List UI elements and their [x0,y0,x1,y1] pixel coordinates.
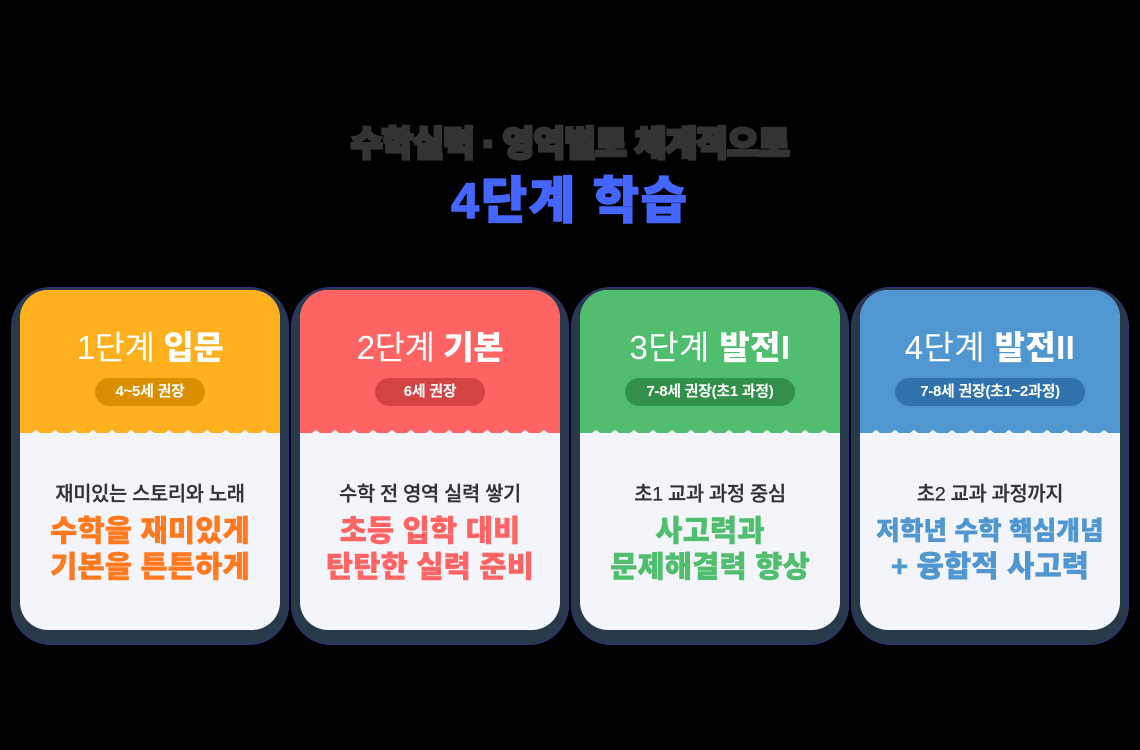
stage 1 heading: 1단계 입문 [77,329,223,366]
stage 2 highlight: 초등 입학 대비 [340,515,520,548]
stage 2 description: 수학 전 영역 실력 쌓기 [339,484,521,506]
stage 1 highlight: 수학을 재미있게 [50,515,250,548]
stage 3 highlight [610,515,810,584]
stage 1 header [20,290,280,434]
stage 3 highlight: 사고력과 [655,515,765,548]
stage 2 heading: 2단계 기본 [357,329,503,366]
stage 1 highlight [50,515,250,584]
stage 4 heading: 4단계 발전II [905,329,1075,366]
scalloped edge [300,430,560,434]
stage 4 highlight: 저학년 수학 핵심개념 [876,518,1104,546]
stage 1 age pill: 4~5세 권장 [116,383,184,400]
stage 2 header [300,290,560,434]
stage 1 age pill [95,378,205,406]
stage 4 age pill [895,378,1085,406]
stage 3 age pill [625,378,795,406]
stage 4 age pill: 7-8세 권장(초1~2과정) [920,383,1060,400]
stage 2 age pill: 6세 권장 [404,383,456,400]
panel: stage 4 [851,287,1129,645]
title line 1: 수학실력 · 영역별로 체계적으로 [351,126,789,164]
stage 4 header [860,290,1120,434]
stage 3 header [580,290,840,434]
scalloped edge [580,430,840,434]
stage 2 highlight [326,515,534,584]
panel: stage 2 [291,287,569,645]
stage 1 description: 재미있는 스토리와 노래 [55,484,245,506]
stage 4 highlight: + 융합적 사고력 [891,550,1089,584]
panel: stage 3 [571,287,849,645]
stage 4 highlight [876,517,1104,584]
scalloped edge [20,430,280,434]
stage 1 highlight: 기본을 튼튼하게 [50,551,250,584]
stage 3 heading: 3단계 발전I [630,329,790,366]
stage 3 highlight: 문제해결력 향상 [610,551,810,584]
stage 4 description: 초2 교과 과정까지 [917,484,1063,506]
scalloped edge [860,430,1120,434]
stage 3 description: 초1 교과 과정 중심 [634,484,786,506]
stage 3 age pill: 7-8세 권장(초1 과정) [647,383,773,400]
stage 2 highlight: 탄탄한 실력 준비 [326,551,534,584]
title block [350,124,790,229]
panel: stage 1 [11,287,289,645]
title line 2: 4단계 학습 [451,173,689,229]
stage 2 age pill [375,378,485,406]
